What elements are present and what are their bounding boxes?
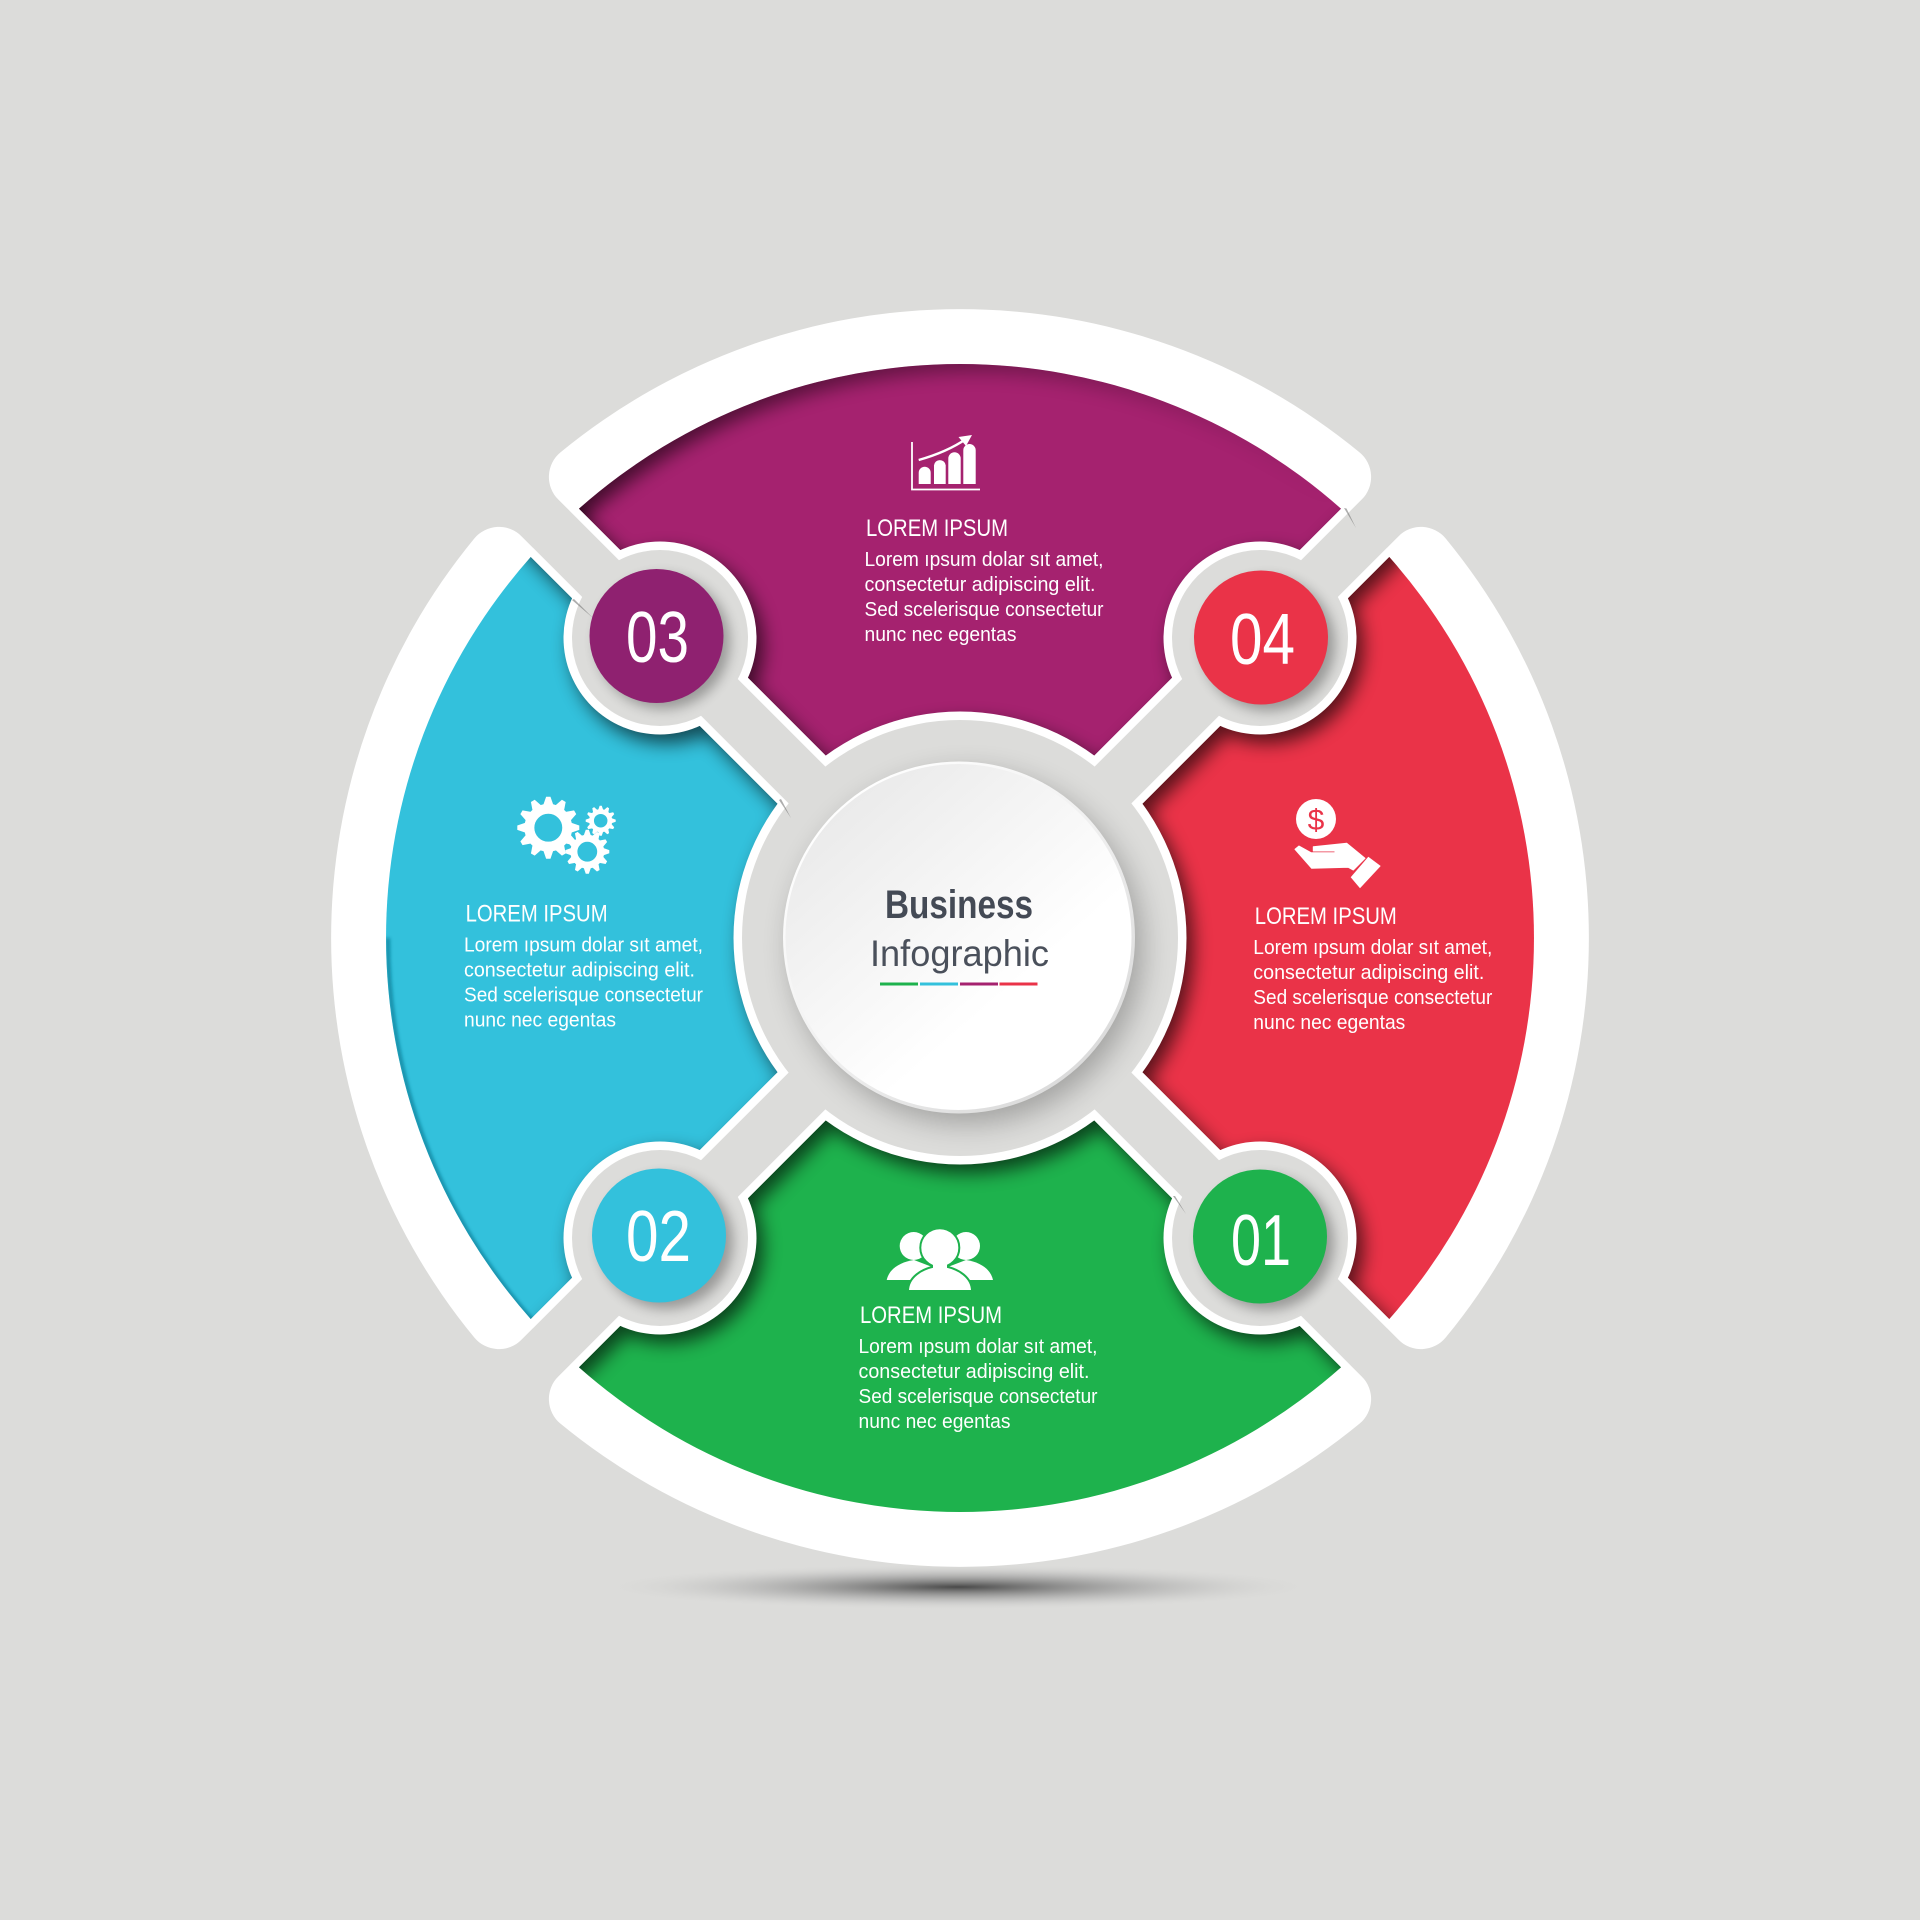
text: purple panel: consectetur adipiscing elit. — [864, 573, 1096, 596]
icon: hand with dollar coin: $ — [1308, 804, 1325, 837]
text: blue panel: LOREM IPSUM — [466, 901, 608, 928]
shadows cast on the colored panels — [522, 504, 1405, 1382]
text: purple panel: LOREM IPSUM — [866, 515, 1008, 542]
number badge 04: 04 — [1230, 600, 1295, 680]
text: purple panel: Sed scelerisque consectetur — [864, 598, 1104, 621]
text: purple panel: Lorem ıpsum dolar sıt amet, — [864, 548, 1104, 571]
colored panels — [386, 364, 1534, 1512]
center title: Infographic — [870, 933, 1049, 974]
text: green panel: Lorem ıpsum dolar sıt amet, — [858, 1335, 1098, 1358]
text: blue panel — [464, 901, 703, 1032]
icon: growth chart — [912, 435, 980, 490]
text: green panel: LOREM IPSUM — [860, 1302, 1002, 1329]
number badge 01 — [1193, 1170, 1327, 1304]
text: red panel: Lorem ıpsum dolar sıt amet, — [1253, 936, 1492, 959]
center disc — [783, 762, 1135, 1114]
ground shadow — [598, 1564, 1318, 1610]
text: green panel: nunc nec egentas — [858, 1410, 1010, 1433]
text: purple panel — [864, 515, 1104, 646]
text: red panel: consectetur adipiscing elit. — [1253, 961, 1484, 984]
text: red panel — [1253, 903, 1492, 1034]
center title — [870, 883, 1049, 974]
center title: Business — [885, 883, 1033, 927]
text: blue panel: Lorem ıpsum dolar sıt amet, — [464, 934, 703, 957]
white outline of the central cross — [527, 505, 1393, 1371]
number badge 03: 03 — [626, 598, 689, 678]
gray central cross — [447, 425, 1473, 1451]
number badge 01: 01 — [1231, 1201, 1291, 1281]
icon: gears — [517, 797, 616, 874]
text: red panel: LOREM IPSUM — [1255, 903, 1397, 930]
text: blue panel: consectetur adipiscing elit. — [464, 959, 695, 982]
icon: team — [887, 1228, 993, 1291]
panel: red — [1008, 557, 1534, 1319]
panel: purple — [579, 364, 1341, 890]
color underline — [880, 982, 1038, 986]
shadows on the gray cross — [596, 575, 1335, 1310]
panel: blue — [386, 557, 912, 1319]
text: green panel: Sed scelerisque consectetur — [858, 1385, 1098, 1408]
icon: hand with dollar coin — [1295, 799, 1381, 888]
text: blue panel: nunc nec egentas — [464, 1009, 616, 1032]
text: purple panel: nunc nec egentas — [864, 623, 1016, 646]
text: red panel: nunc nec egentas — [1253, 1011, 1405, 1034]
number badge 03 — [590, 569, 724, 703]
number badge 04 — [1194, 570, 1328, 704]
text: red panel: Sed scelerisque consectetur — [1253, 986, 1492, 1009]
fold slivers at panel corners — [572, 508, 1356, 1214]
text: green panel: consectetur adipiscing elit. — [858, 1360, 1090, 1383]
thin shadow on the blue panel edge — [386, 936, 534, 1319]
shadow of the frame on the purple panel — [579, 364, 1256, 524]
panel: green — [579, 986, 1341, 1512]
text: green panel — [858, 1302, 1098, 1433]
outer white frame — [331, 309, 1589, 1567]
text: blue panel: Sed scelerisque consectetur — [464, 984, 703, 1007]
number badge 02: 02 — [626, 1197, 691, 1277]
number badge 02 — [592, 1168, 726, 1302]
